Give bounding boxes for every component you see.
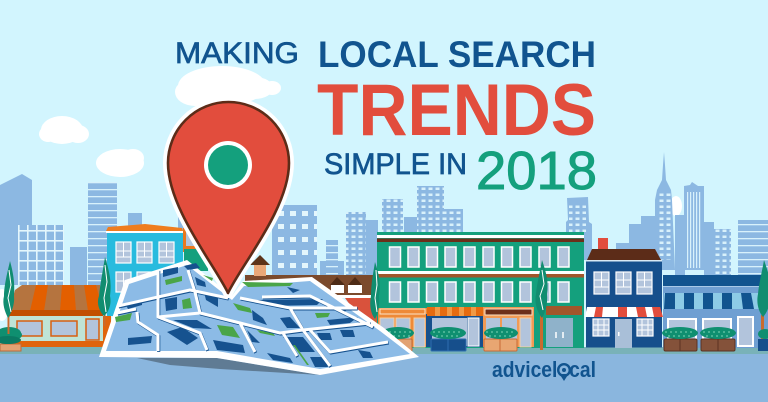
storefront: brown awning and doors bbox=[546, 306, 582, 347]
tree: on green building bbox=[535, 260, 548, 350]
storefront: blue middle bbox=[426, 307, 484, 347]
tree: far right bbox=[757, 260, 768, 351]
shop: orange awning bbox=[9, 285, 111, 347]
planter: far left bbox=[0, 327, 22, 351]
planter: brown 1 bbox=[662, 327, 698, 351]
folded map bbox=[99, 260, 419, 375]
title: simple in: SIMPLE IN bbox=[324, 148, 467, 181]
planter: green building 1 bbox=[382, 327, 414, 351]
striped awning bbox=[585, 307, 663, 317]
title: trends: TRENDS bbox=[317, 70, 596, 151]
building: shop with navy awning bbox=[663, 275, 768, 348]
title: 2018: 2018 bbox=[476, 141, 597, 201]
title: making: MAKING bbox=[175, 37, 299, 70]
map parks bbox=[115, 275, 330, 365]
tree: left bbox=[3, 261, 14, 334]
clouds bbox=[0, 66, 682, 321]
planter: brown 2 bbox=[700, 327, 736, 351]
skyline: right bbox=[616, 152, 768, 276]
building: brown roof row behind map bbox=[245, 275, 384, 330]
upper windows bbox=[390, 247, 569, 302]
small tower roof bbox=[250, 255, 270, 276]
planter: orange bbox=[484, 327, 518, 351]
sidewalk bbox=[0, 347, 768, 354]
storefront: orange right bbox=[483, 307, 534, 347]
map shadow bbox=[137, 358, 320, 375]
logo: advice local: advicelocal bbox=[492, 357, 596, 382]
building: behind map, green and orange bbox=[183, 228, 208, 271]
map roads bbox=[117, 270, 388, 366]
ground bbox=[0, 349, 768, 402]
building: long green bbox=[377, 232, 584, 348]
building: blue house bbox=[585, 238, 663, 348]
tree: left of green building bbox=[370, 262, 380, 326]
skyline: left bbox=[0, 174, 188, 287]
storefront: orange left bbox=[378, 308, 428, 347]
skyline: centre bbox=[272, 186, 592, 281]
planter: blue bbox=[430, 327, 466, 351]
tree: by cyan building bbox=[98, 257, 111, 326]
building: cyan with orange roof bbox=[106, 224, 183, 316]
map blocks bbox=[126, 263, 373, 367]
location pin bbox=[168, 102, 289, 293]
map road casing bbox=[118, 271, 389, 367]
title: local search: LOCAL SEARCH bbox=[318, 33, 596, 75]
